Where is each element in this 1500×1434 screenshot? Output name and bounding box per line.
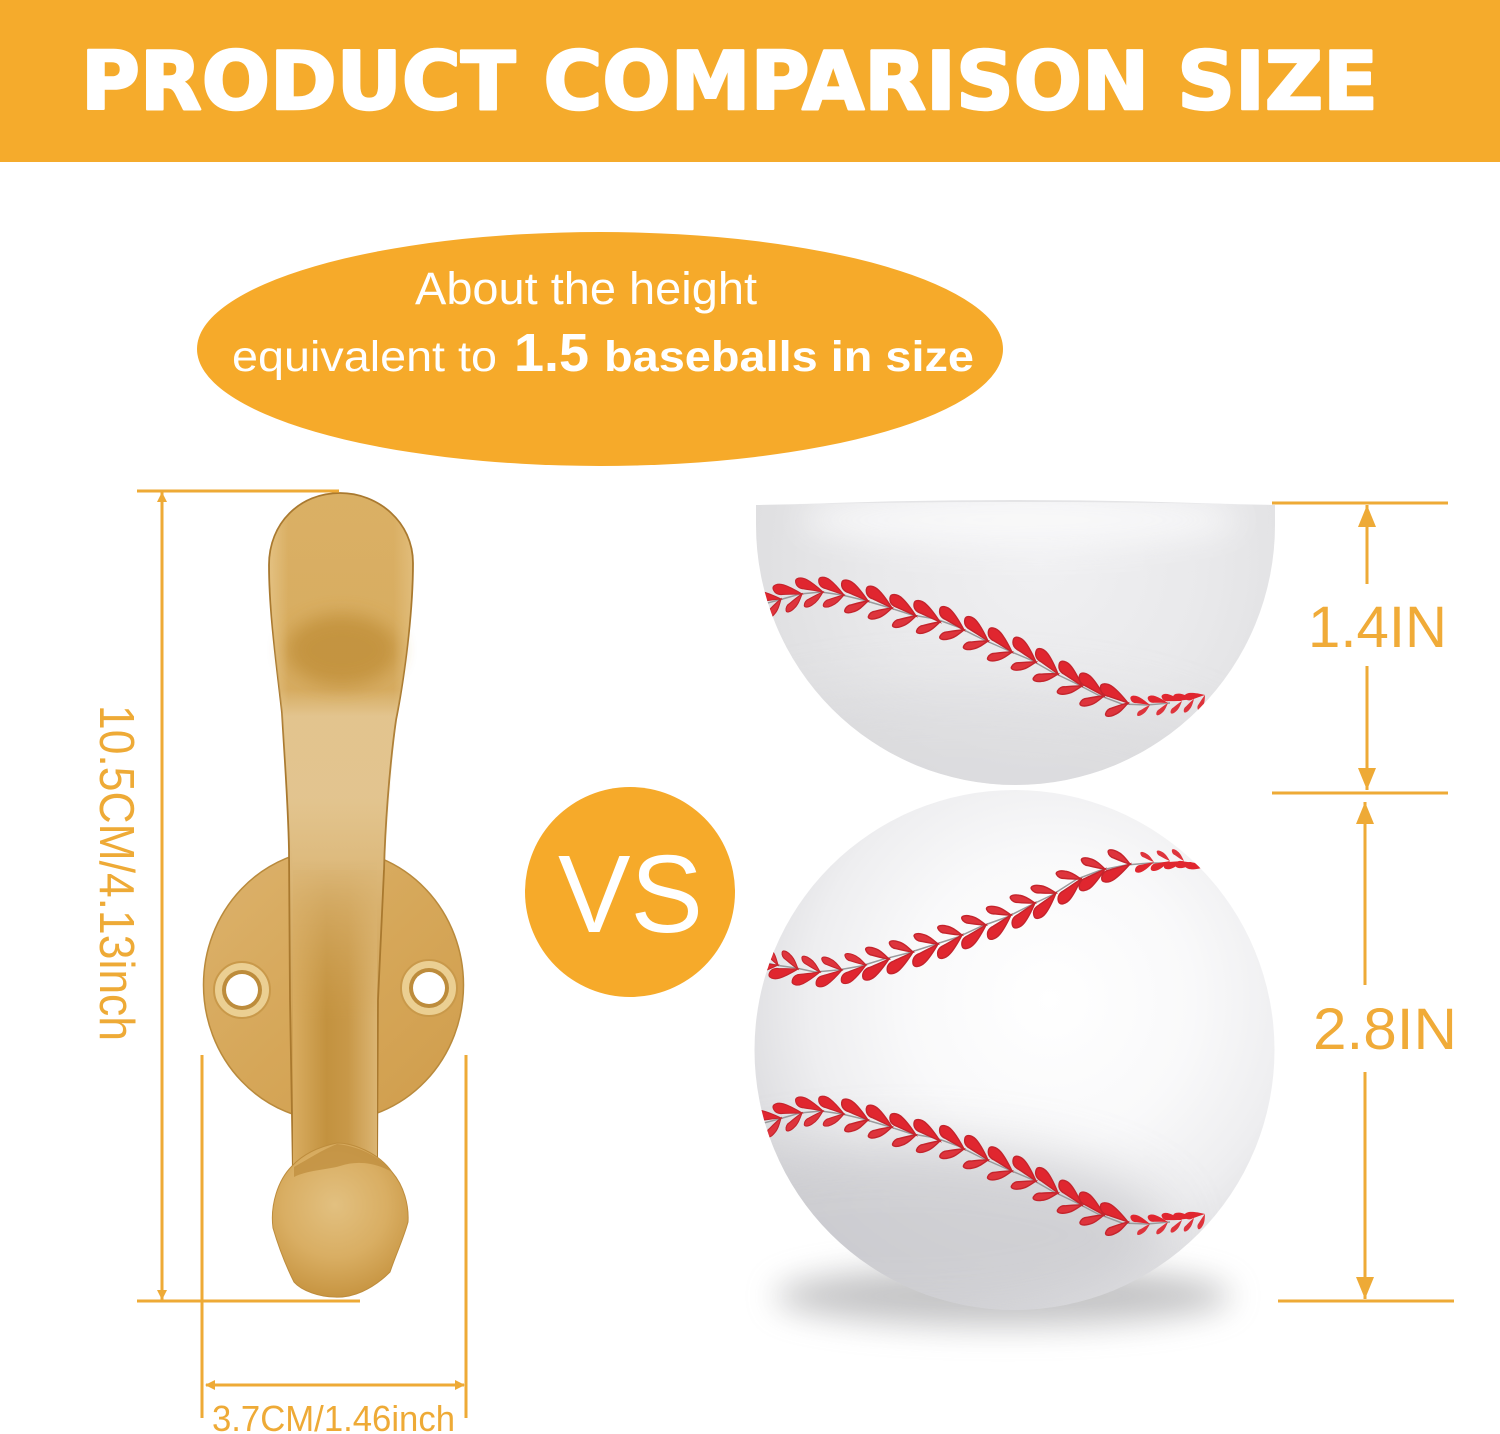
hook knob bbox=[272, 1143, 408, 1297]
dimension: hook height bbox=[137, 491, 360, 1301]
half baseball bbox=[756, 500, 1275, 785]
upper seam bbox=[760, 861, 1216, 972]
hook arm dark dimple bbox=[286, 614, 398, 686]
VS badge bbox=[525, 787, 735, 997]
lower seam bbox=[760, 1111, 1215, 1224]
callout: height equivalent bbox=[197, 232, 1003, 466]
label: ball height: 2.8IN bbox=[1313, 997, 1457, 1062]
hook arm bbox=[269, 493, 413, 1175]
callout line 2: baseballs in size bbox=[604, 333, 974, 381]
label: hook height: 10.5CM/4.13inch bbox=[89, 705, 143, 1041]
arrow bbox=[1358, 505, 1376, 527]
arrow bbox=[1356, 1277, 1374, 1299]
half ball body bbox=[756, 502, 1275, 785]
baseball bbox=[754, 790, 1274, 1342]
title: PRODUCT COMPARISON SIZE bbox=[81, 35, 1378, 128]
knob top crease bbox=[294, 1144, 392, 1177]
callout line 2: equivalent to bbox=[232, 333, 497, 381]
arrow bbox=[455, 1380, 465, 1390]
arrow bbox=[157, 492, 167, 502]
arrow bbox=[157, 1290, 167, 1300]
hook arm edge highlight bbox=[270, 494, 412, 870]
right screw hole bbox=[401, 960, 457, 1016]
dimension: hook width bbox=[202, 1055, 466, 1418]
half ball rim bbox=[756, 500, 1275, 512]
callout line 2: 1.5 bbox=[514, 323, 589, 383]
callout line 1: About the height bbox=[415, 263, 758, 314]
hook stem shading bbox=[293, 884, 377, 1164]
dimension: half ball height bbox=[1272, 503, 1448, 793]
hook mounting plate bbox=[204, 849, 464, 1121]
baseball ground shadow bbox=[775, 1266, 1231, 1326]
half ball seam bbox=[760, 592, 1215, 705]
arrow bbox=[1356, 802, 1374, 824]
baseball body bbox=[754, 790, 1274, 1310]
half ball shading bbox=[764, 502, 1218, 785]
arrow bbox=[205, 1380, 215, 1390]
label: half ball height: 1.4IN bbox=[1308, 595, 1447, 660]
VS text: VS bbox=[558, 833, 703, 956]
title banner bbox=[0, 0, 1500, 162]
left screw hole bbox=[214, 962, 270, 1018]
panel: gold hook bbox=[204, 493, 464, 1297]
arrow bbox=[1358, 768, 1376, 790]
dimension: ball height bbox=[1278, 802, 1454, 1301]
baseball shading bbox=[762, 849, 1205, 1310]
